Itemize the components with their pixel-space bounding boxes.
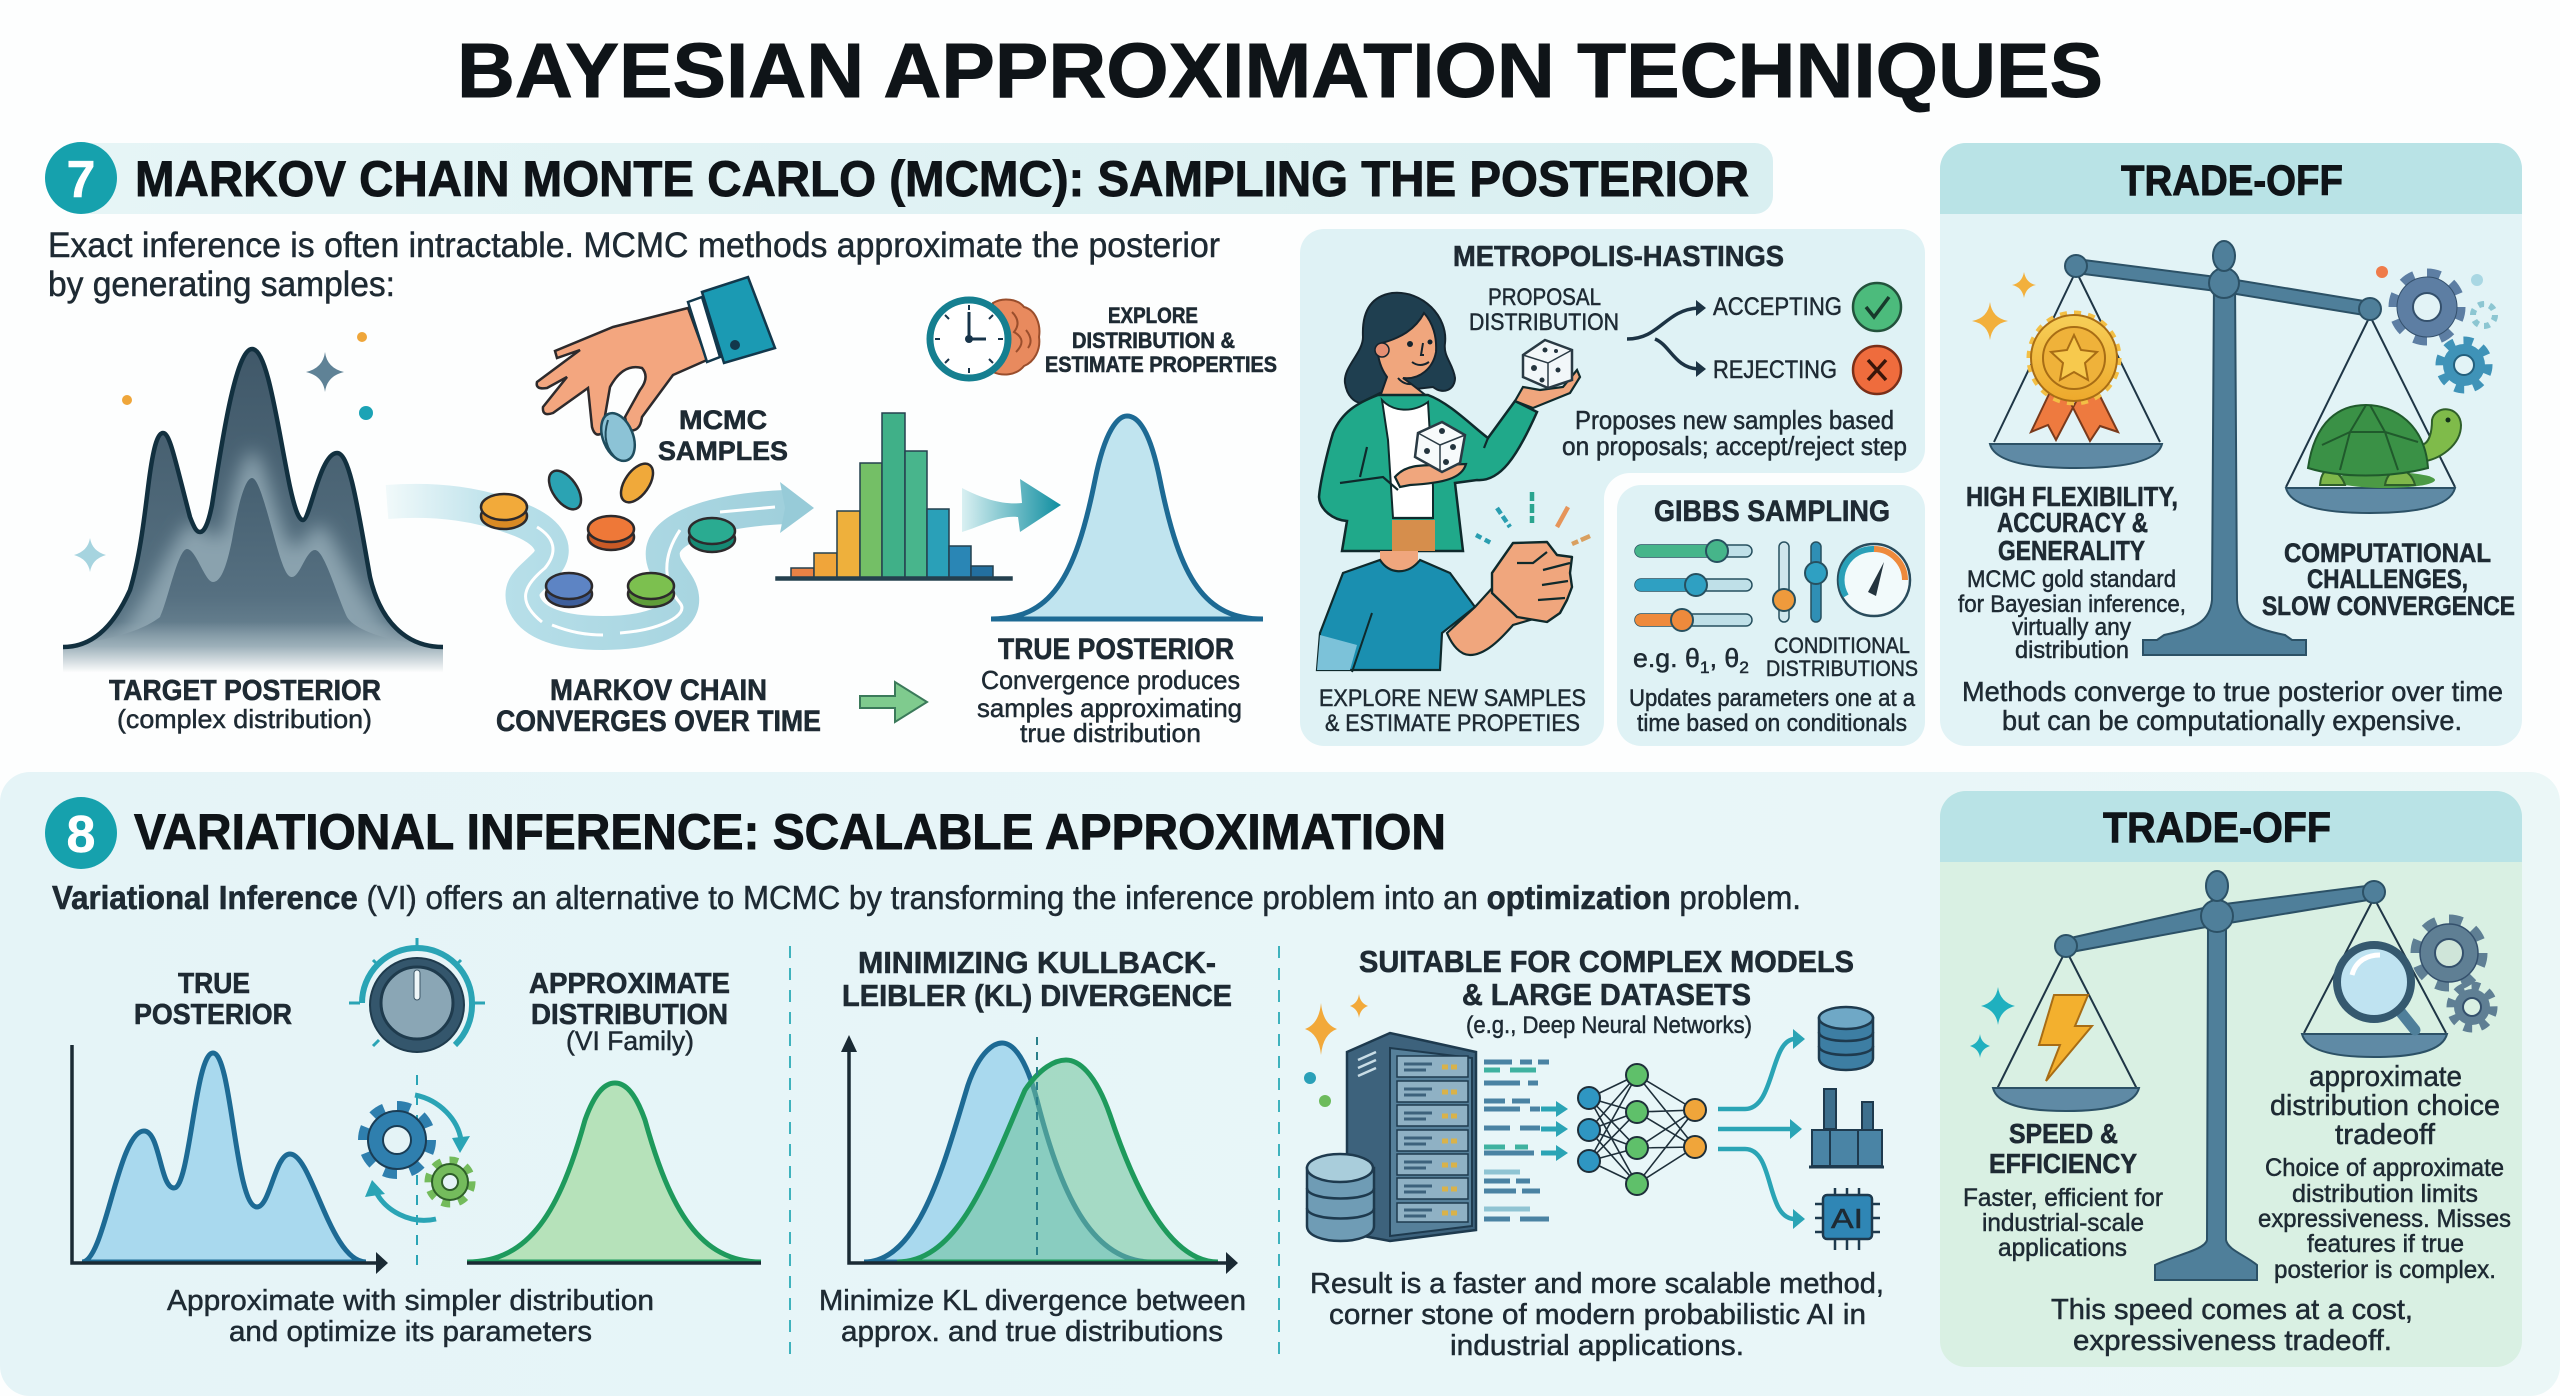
data streams <box>1484 1062 1560 1219</box>
caption: KL: Minimize KL divergence between <box>819 1285 1246 1317</box>
arrows to outputs <box>1718 1029 1805 1229</box>
sample coins <box>481 458 735 607</box>
rejecting <box>1713 346 1901 394</box>
label: approximate distribution tradeoff: tradeoff <box>2335 1119 2436 1151</box>
arrowheads into network <box>1556 1101 1568 1161</box>
icon: medal <box>2030 314 2118 441</box>
heading: METROPOLIS-HASTINGS <box>1453 241 1784 273</box>
summary: Methods converge to true posterior over time <box>1962 676 2503 707</box>
label: high flexibility: ACCURACY & <box>1997 507 2148 538</box>
panel: trade-off VI <box>1940 791 2522 1367</box>
label: explore distribution: EXPLORE <box>1108 303 1198 328</box>
icon: vertical sliders <box>1773 542 1827 622</box>
label: conditional distributions: CONDITIONAL <box>1774 633 1910 658</box>
label: target posterior <box>109 675 381 734</box>
heading: KL divergence: MINIMIZING KULLBACK- <box>858 945 1216 980</box>
label: approximate distribution tradeoff: features if true <box>2307 1230 2464 1258</box>
chart: KL divergence overlap <box>841 1035 1238 1274</box>
caption: scalable method: industrial applications. <box>1450 1330 1744 1362</box>
label: explore distribution: DISTRIBUTION & <box>1072 328 1235 353</box>
icon: output database <box>1819 1007 1873 1070</box>
label: MCMC samples: SAMPLES <box>658 436 788 466</box>
label: MCMC samples: MCMC <box>679 405 767 435</box>
section 7 intro: Exact inference is often intractable. MCMC methods approximate the posterior <box>48 226 1220 265</box>
arrowheads <box>1696 300 1706 377</box>
label: true posterior: POSTERIOR <box>134 999 292 1031</box>
label: approximate distribution: DISTRIBUTION <box>531 999 728 1031</box>
heading: GIBBS SAMPLING <box>1654 495 1890 528</box>
description <box>1562 405 1907 461</box>
label: explore new samples: & ESTIMATE PROPETIES <box>1325 710 1580 737</box>
label: high flexibility: for Bayesian inference, <box>1958 591 2186 618</box>
chart: approximate gaussian <box>467 1083 761 1263</box>
summary <box>2051 1294 2413 1357</box>
caption: approximate <box>167 1285 654 1348</box>
heading: TRADE-OFF <box>2121 157 2343 205</box>
label: explore distribution: ESTIMATE PROPERTIES <box>1045 352 1277 377</box>
description <box>1629 685 1916 737</box>
label: true posterior: samples approximating <box>977 693 1242 723</box>
label: true posterior <box>977 633 1242 748</box>
panel: section 8 <box>0 772 2560 1396</box>
icon: neural network <box>1578 1064 1706 1195</box>
label: approximate distribution tradeoff: expressiveness. Misses <box>2258 1205 2511 1233</box>
summary <box>1962 676 2503 736</box>
label: Markov chain converges: MARKOV CHAIN <box>550 674 767 707</box>
caption: approximate: and optimize its parameters <box>229 1316 592 1348</box>
heading: suitable for complex models: (e.g., Deep Neural Networks) <box>1466 1012 1752 1039</box>
label: Markov chain converges: CONVERGES OVER TIME <box>496 705 821 738</box>
icon: magnifier <box>2337 945 2415 1030</box>
chart: true posterior bell <box>991 416 1263 619</box>
icon: optimization gears <box>364 1095 471 1220</box>
badge 7 <box>45 142 117 214</box>
label: true posterior: Convergence produces <box>981 665 1240 695</box>
section 8 heading: VARIATIONAL INFERENCE: SCALABLE APPROXIMATION <box>134 804 1446 860</box>
label: computational challenges: COMPUTATIONAL <box>2284 538 2491 568</box>
icon: AI chip: AI <box>1831 1203 1863 1234</box>
label: explore new samples: EXPLORE NEW SAMPLES <box>1319 685 1586 712</box>
icon: balance scale <box>1990 241 2455 655</box>
icon: turtle <box>2308 405 2461 488</box>
label: high flexibility: HIGH FLEXIBILITY, <box>1966 481 2178 512</box>
icon: database <box>1307 1154 1374 1241</box>
label: computational challenges <box>2262 538 2515 621</box>
label: speed and efficiency: EFFICIENCY <box>1989 1148 2137 1179</box>
heading: KL divergence: LEIBLER (KL) DIVERGENCE <box>842 978 1232 1013</box>
icon: gold sparkles <box>1972 272 2036 340</box>
label: approximate distribution tradeoff: posterior is complex. <box>2274 1256 2496 1284</box>
label: approximate distribution tradeoff <box>2258 1061 2511 1284</box>
label: computational challenges: SLOW CONVERGENCE <box>2262 591 2515 621</box>
arrow: green <box>860 682 927 722</box>
section 7 intro <box>48 226 1220 304</box>
label: computational challenges: CHALLENGES, <box>2307 564 2468 594</box>
description: on proposals; accept/reject step <box>1562 431 1907 461</box>
label: speed and efficiency: applications <box>1998 1234 2127 1262</box>
caption: KL <box>819 1285 1246 1348</box>
accepting <box>1713 283 1901 331</box>
panel: trade-off MCMC <box>1940 143 2522 746</box>
description: Updates parameters one at a <box>1629 685 1916 712</box>
label: true posterior <box>134 968 292 1031</box>
heading: suitable for complex models <box>1359 944 1854 1039</box>
icon: gauge <box>1838 544 1910 616</box>
label: theta parameters: 2 <box>1739 658 1749 677</box>
heading: suitable for complex models: & LARGE DATASETS <box>1462 977 1751 1012</box>
label: approximate distribution tradeoff: approximate <box>2309 1061 2462 1093</box>
icon: factory <box>1809 1089 1884 1167</box>
label: theta parameters: e.g. θ <box>1633 643 1698 673</box>
section 7 header <box>45 142 1773 214</box>
arrow: teal gradient <box>962 479 1061 532</box>
label: proposal distribution: PROPOSAL <box>1488 284 1601 311</box>
label: Markov chain converges <box>496 674 821 738</box>
icon: man with fist <box>1317 492 1590 672</box>
icon: sparkles and dots <box>1304 994 1368 1107</box>
label: true posterior: true distribution <box>1020 718 1201 748</box>
summary: expressiveness tradeoff. <box>2073 1325 2392 1357</box>
label: approximate distribution: APPROXIMATE <box>529 968 730 1000</box>
title: BAYESIAN APPROXIMATION TECHNIQUES <box>457 28 2103 114</box>
decor: dots and sparkles <box>74 332 373 572</box>
label: theta parameters: 1 <box>1700 658 1710 677</box>
label: approximate distribution <box>529 968 730 1056</box>
chart: target posterior <box>63 332 443 673</box>
summary: but can be computationally expensive. <box>2002 705 2462 736</box>
label: target posterior: (complex distribution) <box>117 704 372 734</box>
icon: AI chip <box>1815 1188 1880 1250</box>
label: high flexibility: MCMC gold standard <box>1967 566 2176 593</box>
label: speed and efficiency: Faster, efficient for <box>1963 1184 2163 1212</box>
label: high flexibility: GENERALITY <box>1998 535 2145 566</box>
badge 8 <box>45 797 117 869</box>
label: proposal distribution: DISTRIBUTION <box>1469 309 1619 336</box>
heading: suitable for complex models: SUITABLE FOR COMPLEX MODELS <box>1359 944 1854 979</box>
label: conditional distributions: DISTRIBUTIONS <box>1766 656 1918 681</box>
label: speed and efficiency <box>1963 1118 2163 1262</box>
label: explore distribution <box>1045 303 1277 377</box>
section 7 intro: by generating samples: <box>48 265 395 304</box>
rejecting: REJECTING <box>1713 356 1837 384</box>
label: proposal distribution <box>1469 284 1619 336</box>
badge 7: 7 <box>67 151 95 209</box>
icon: tuning knob <box>349 938 485 1052</box>
icon: gears <box>2376 266 2495 389</box>
icon: hand dropping sample <box>537 277 775 466</box>
accepting: ACCEPTING <box>1713 293 1842 321</box>
label: high flexibility <box>1958 481 2186 664</box>
caption: approximate: Approximate with simpler distribution <box>167 1285 654 1317</box>
label: target posterior: TARGET POSTERIOR <box>109 675 381 707</box>
label: high flexibility: virtually any <box>2012 614 2131 641</box>
label: speed and efficiency: industrial-scale <box>1982 1209 2144 1237</box>
panel: Gibbs sampling <box>1617 485 1925 746</box>
label: high flexibility: distribution <box>2015 637 2129 664</box>
chart: histogram <box>776 413 1012 580</box>
icon: teal sparkles <box>1970 987 2015 1058</box>
icon: clock and brain <box>930 300 1039 378</box>
panel: Metropolis-Hastings <box>1300 229 1925 746</box>
caption: KL: approx. and true distributions <box>841 1316 1223 1348</box>
label: approximate distribution: (VI Family) <box>566 1026 694 1056</box>
heading: TRADE-OFF <box>2103 804 2331 852</box>
section 8 intro: Variational Inference (VI) offers an alternative to MCMC by transforming the inference problem into an optimization problem. <box>52 879 1801 916</box>
markov chain flow ribbon <box>387 482 814 635</box>
label: explore new samples <box>1319 685 1586 737</box>
icon: gray gears <box>2416 920 2493 1028</box>
section 7 heading: MARKOV CHAIN MONTE CARLO (MCMC): SAMPLING THE POSTERIOR <box>135 151 1749 207</box>
label: approximate distribution tradeoff: Choice of approximate <box>2265 1154 2504 1182</box>
label: true posterior: TRUE <box>178 968 250 1000</box>
dashed centre line <box>416 1075 418 1271</box>
badge 8: 8 <box>67 806 95 864</box>
chart: multimodal true posterior <box>72 1045 388 1274</box>
caption: scalable method: Result is a faster and more scalable method, <box>1310 1268 1884 1300</box>
icon: balance scale tilted <box>1993 871 2447 1280</box>
label: speed and efficiency: SPEED & <box>2009 1118 2118 1149</box>
label: conditional distributions <box>1766 633 1918 681</box>
icon: lightning bolt <box>2039 995 2092 1081</box>
caption: scalable method <box>1310 1268 1884 1362</box>
label: approximate distribution tradeoff: distribution choice <box>2270 1090 2500 1122</box>
label: MCMC samples <box>658 405 788 466</box>
divider <box>790 946 1279 1357</box>
label: theta parameters: , θ <box>1710 643 1739 673</box>
description: Proposes new samples based <box>1575 405 1894 435</box>
label: true posterior: TRUE POSTERIOR <box>998 633 1234 666</box>
description: time based on conditionals <box>1637 710 1907 737</box>
heading: KL divergence <box>842 945 1232 1013</box>
caption: scalable method: corner stone of modern probabilistic AI in <box>1329 1299 1866 1331</box>
summary: This speed comes at a cost, <box>2051 1294 2413 1326</box>
arrow: fork <box>1627 308 1698 369</box>
icon: woman with dice <box>1319 293 1580 551</box>
icon: horizontal sliders <box>1635 540 1752 631</box>
label: approximate distribution tradeoff: distribution limits <box>2292 1180 2478 1208</box>
icon: server rack <box>1347 1033 1476 1241</box>
